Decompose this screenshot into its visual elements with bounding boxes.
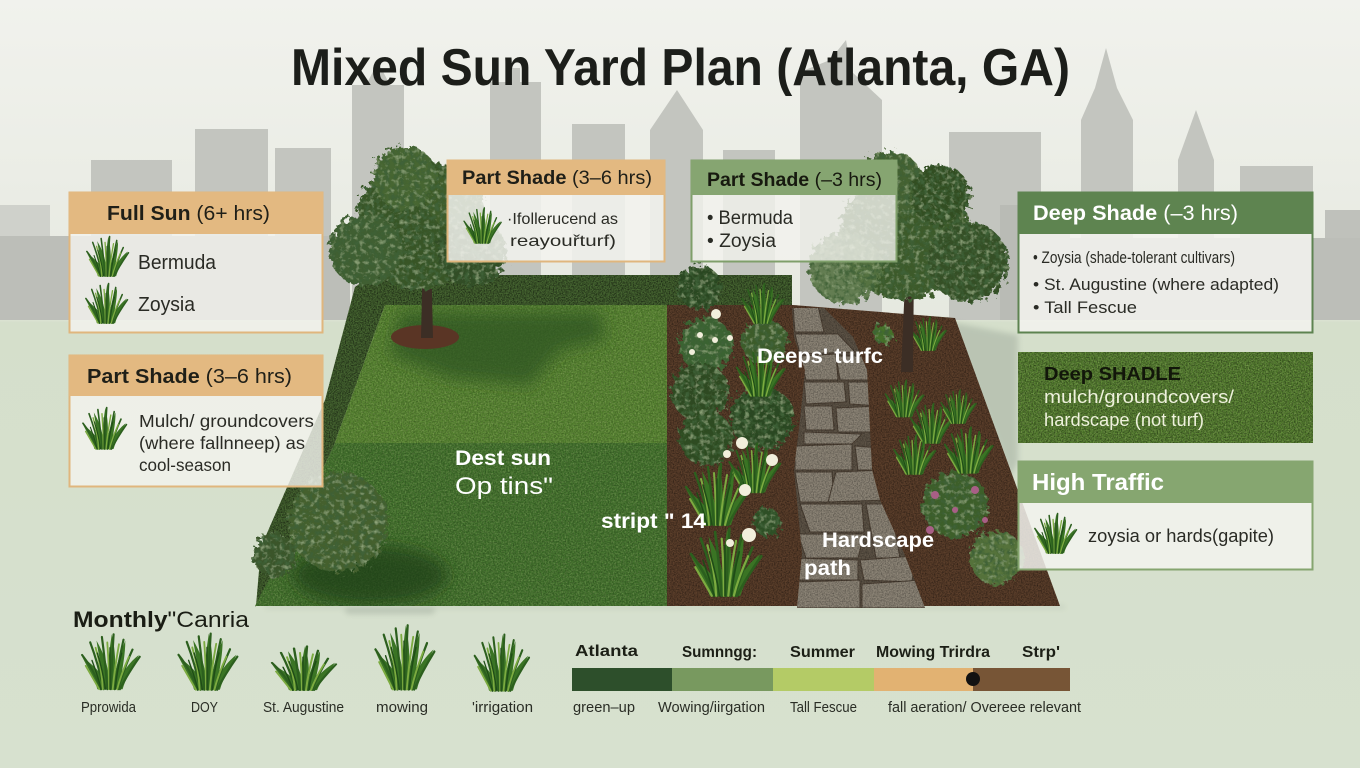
leafy plants: [686, 284, 993, 596]
legend labels: DOY: [191, 699, 218, 716]
heading: part shade top: Part Shade (3–6 hrs): [462, 168, 652, 189]
left bush: [253, 472, 388, 577]
icon: grass zoysia: [86, 284, 127, 323]
yard labels: path: [804, 557, 851, 580]
stone path: [790, 300, 930, 610]
panel: part shade top left: [447, 160, 665, 262]
legend labels: mowing: [376, 699, 428, 716]
legend: monthly: [73, 607, 533, 716]
list: full sun grasses: Zoysia: [138, 294, 196, 316]
list: part shade grasses: [707, 208, 793, 252]
text: deep shade mulch note: Deep SHADLE: [1044, 364, 1181, 384]
yard illustration: [250, 146, 1065, 614]
icon: grass 2: [178, 634, 237, 690]
heading: part shade: Part Shade (3–6 hrs): [87, 366, 292, 388]
heading: full sun: Full Sun (6+ hrs): [107, 203, 270, 225]
legend labels: [81, 699, 533, 716]
panel: deep shade grass: [1018, 352, 1313, 443]
yard labels: stript " 14: [601, 510, 706, 533]
timeline labels: Tall Fescue: [790, 699, 857, 716]
timeline headings: Mowing Trirdra: [876, 644, 990, 661]
list: deep shade grasses: [1033, 248, 1279, 317]
icon: grass 1: [82, 634, 140, 689]
text: part shade notes: (where fallnneep) as: [139, 433, 305, 453]
ground shadows: [265, 322, 1065, 614]
legend labels: 'irrigation: [472, 699, 533, 716]
legend labels: Pprowida: [81, 699, 137, 716]
text: deep shade mulch note: hardscape (not turf): [1044, 410, 1204, 430]
heading: part shade green: Part Shade (–3 hrs): [707, 169, 882, 191]
text: deep shade mulch note: mulch/groundcovers/: [1044, 387, 1234, 407]
title: Mixed Sun Yard Plan (Atlanta, GA): [291, 39, 1070, 97]
panel: part shade top right: [691, 160, 897, 262]
text: part shade top notes: [507, 211, 618, 250]
timeline labels: [573, 699, 1082, 716]
shrubs: [671, 265, 1024, 585]
yard labels: Dest sun: [455, 447, 551, 470]
list: part shade grasses: • Bermuda: [707, 208, 793, 229]
heading: high traffic: High Traffic: [1032, 469, 1164, 495]
back hedge: [354, 275, 792, 307]
icon: grass: [464, 208, 501, 243]
text: part shade notes: cool-season: [139, 455, 231, 475]
heading: deep shade: Deep Shade (–3 hrs): [1033, 202, 1238, 225]
icon: grass 5: [475, 635, 529, 691]
yard labels: Hardscape: [822, 529, 934, 552]
yard labels: Op tins": [455, 473, 553, 500]
city skyline: [0, 40, 1360, 320]
timeline headings: Strp': [1022, 644, 1060, 661]
list: full sun grasses: Bermuda: [138, 252, 217, 274]
icon: grass 3: [272, 646, 336, 690]
list: deep shade grasses: • St. Augustine (where adapted): [1033, 275, 1279, 294]
list: part shade grasses: • Zoysia: [707, 231, 776, 252]
panel: part shade left: [69, 355, 323, 486]
text: part shade top notes: reayouřturf): [510, 233, 616, 250]
timeline headings: Summer: [790, 644, 855, 661]
panel: full sun: [69, 192, 323, 332]
icon: grass: [1035, 514, 1076, 553]
text: part shade top notes: ·Ifollerucend as: [507, 211, 618, 228]
list: deep shade grasses: • Zoysia (shade-tolerant cultivars): [1033, 248, 1235, 267]
icon: grass: [83, 408, 126, 449]
legend labels: St. Augustine: [263, 699, 344, 716]
timeline headings: Atlanta: [575, 643, 638, 660]
right tree: [809, 151, 1008, 372]
yard labels: Deeps' turfc: [757, 345, 883, 368]
panel: deep shade: [1018, 192, 1313, 332]
flowers: [689, 309, 778, 547]
text: deep shade mulch note: [1044, 364, 1234, 430]
seasonal timeline bar: [572, 643, 1082, 716]
left tree: [329, 146, 506, 349]
text: part shade notes: [139, 411, 314, 475]
yard labels: [455, 345, 934, 580]
list: full sun grasses: [138, 252, 217, 316]
mulch bed: [665, 300, 1065, 610]
lawn: [250, 300, 670, 613]
text: part shade notes: Mulch/ groundcovers: [139, 411, 314, 431]
timeline labels: fall aeration/ Overeee relevant: [888, 699, 1082, 716]
timeline labels: green–up: [573, 699, 635, 716]
list: deep shade grasses: • Tall Fescue: [1033, 298, 1137, 317]
timeline headings: [575, 643, 1060, 661]
left hedge: [255, 287, 384, 607]
icon: grass 4: [375, 625, 434, 689]
timeline labels: Wowing/iirgation: [658, 699, 765, 716]
icon: grass bermuda: [87, 237, 128, 276]
text: high traffic note: zoysia or hards(gapite): [1088, 526, 1274, 546]
timeline headings: Sumnngg:: [682, 644, 757, 661]
tree shade on lawn: [390, 312, 605, 385]
panel: high traffic: [1018, 461, 1313, 570]
heading: monthly: Monthly "Canria: [73, 607, 250, 632]
